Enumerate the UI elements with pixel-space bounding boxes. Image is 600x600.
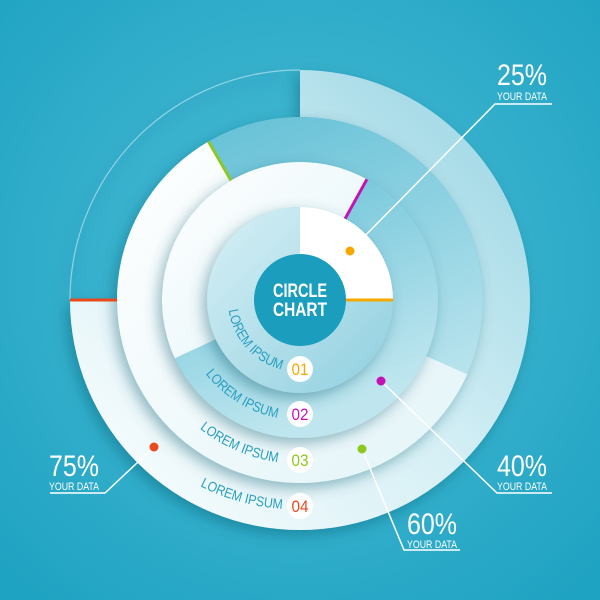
number badges: 01 (292, 360, 308, 379)
data labels: 25% (497, 59, 547, 92)
lorem labels (200, 309, 284, 509)
number badges (287, 356, 313, 519)
lorem labels: LOREM IPSUM (200, 422, 278, 462)
ring 4: 75% (70, 70, 530, 530)
data labels: 60% (407, 508, 457, 541)
center circle title: CHART (273, 300, 327, 321)
lorem labels: LOREM IPSUM (206, 368, 278, 418)
data labels: YOUR DATA (497, 481, 548, 493)
lorem labels: LOREM IPSUM (228, 309, 284, 370)
center circle title: CIRCLE (273, 281, 327, 302)
ring 3: 60% (117, 117, 483, 483)
color ticks (70, 142, 393, 300)
number badges: 03 (292, 451, 308, 470)
dots (150, 246, 386, 454)
data labels (49, 59, 548, 551)
center circle title (254, 254, 346, 346)
number badges: 04 (292, 497, 308, 516)
data labels: YOUR DATA (49, 481, 100, 493)
ring 1: 25% (207, 207, 393, 393)
number badges: 02 (292, 405, 308, 424)
data labels: YOUR DATA (497, 91, 548, 103)
data labels: 75% (49, 450, 99, 483)
lorem labels: LOREM IPSUM (200, 478, 282, 509)
data labels: YOUR DATA (407, 539, 458, 551)
ring 2: 40% (162, 162, 438, 438)
leader lines (50, 104, 552, 550)
data labels: 40% (497, 450, 547, 483)
